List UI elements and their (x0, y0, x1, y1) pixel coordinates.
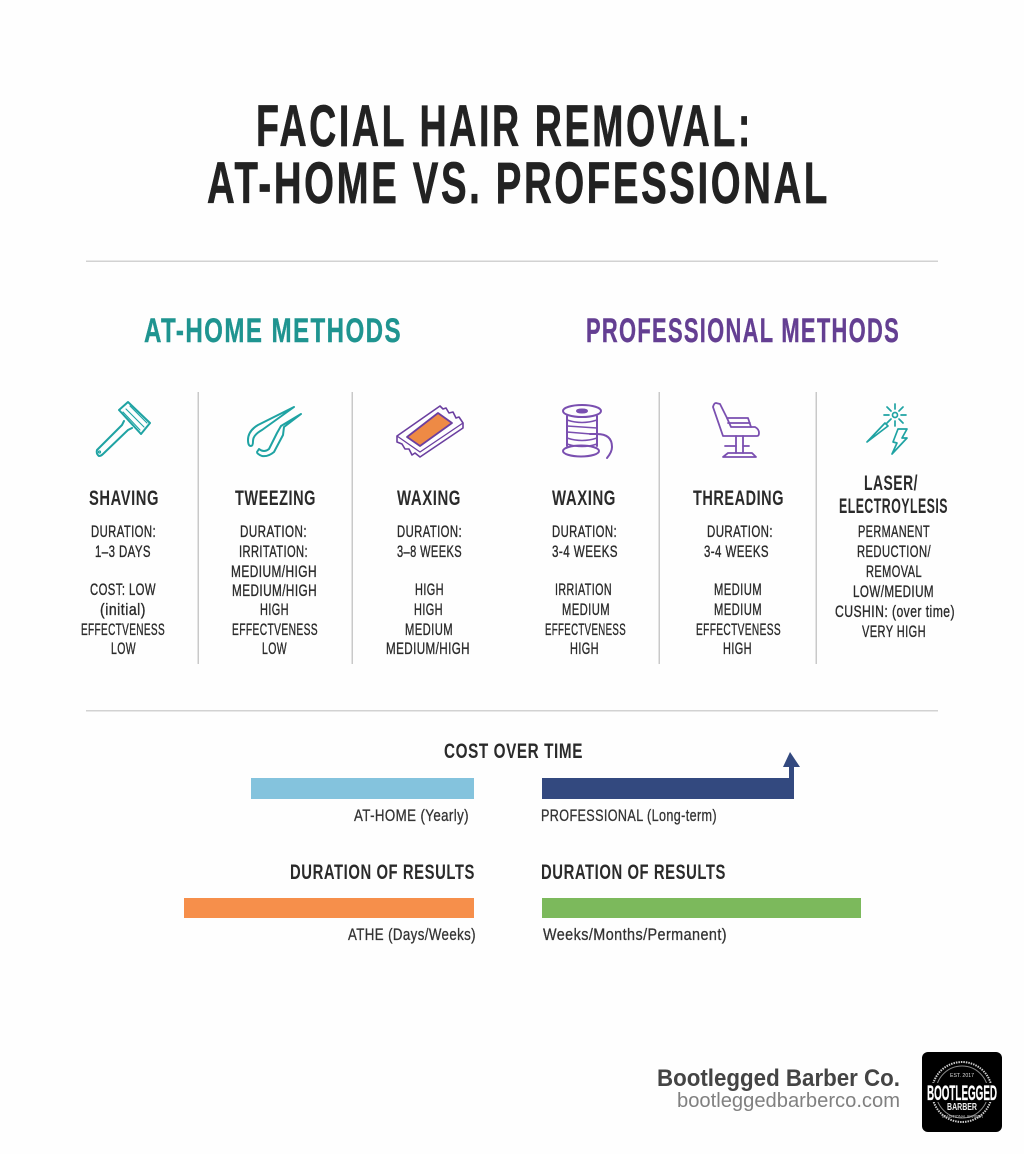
text: shaving details: DURATION: (91, 523, 156, 541)
text: laser details (835, 472, 955, 641)
text: tweezing details: EFFECTVENESS (232, 621, 318, 639)
text: waxing details: IRRIATION (555, 581, 612, 599)
text: shaving details: (initial) (100, 601, 146, 619)
text: waxing details: EFFECTVENESS (545, 621, 626, 639)
panel: threading (693, 403, 784, 658)
text: waxing details: WAXING (397, 487, 461, 510)
icon: laser spark and bolt (867, 404, 907, 454)
icon: thread spool (563, 405, 612, 458)
panel: shaving (81, 402, 165, 658)
heading: duration of results at-home: DURATION OF RESULTS (290, 861, 475, 884)
text: laser details: REMOVAL (866, 563, 922, 581)
text: shaving details: COST: LOW (90, 581, 156, 599)
text: shaving details: SHAVING (89, 487, 159, 510)
footer url: bootleggedbarberco.com (677, 1090, 900, 1112)
icon: razor (97, 402, 150, 456)
heading: at-home methods: AT-HOME METHODS (144, 312, 402, 350)
text: tweezing details (231, 487, 318, 658)
text: waxing details (545, 487, 626, 658)
panel: waxing at-home (386, 406, 470, 658)
logo badge: TRADITIONAL BARBER (941, 1114, 984, 1119)
text: waxing details: HIGH (570, 640, 599, 658)
text: waxing details: 3–8 WEEKS (397, 543, 462, 561)
text: waxing details: HIGH (415, 581, 444, 599)
text: tweezing details: LOW (262, 640, 287, 658)
text: threading details: 3-4 WEEKS (704, 543, 769, 561)
text: tweezing details: MEDIUM/HIGH (231, 563, 317, 581)
text: laser details: LOW/MEDIUM (853, 583, 934, 601)
label: at-home days and weeks: ATHE (Days/Weeks) (348, 926, 476, 944)
text: laser details: PERMANENT (858, 523, 930, 541)
text: waxing details: HIGH (414, 601, 443, 619)
text: threading details: MEDIUM (714, 581, 762, 599)
text: threading details (693, 487, 784, 658)
bar: at-home cost (251, 778, 474, 799)
text: tweezing details: DURATION: (240, 523, 307, 541)
text: tweezing details: HIGH (260, 601, 289, 619)
heading: cost over time: COST OVER TIME (444, 740, 583, 763)
bar: at-home duration (184, 898, 474, 918)
text: waxing details: MEDIUM (405, 621, 453, 639)
icon: tweezers (248, 407, 301, 456)
text: threading details: DURATION: (707, 523, 773, 541)
text: waxing details: WAXING (552, 487, 616, 510)
text: shaving details: EFFECTVENESS (81, 621, 165, 639)
footer brand name: Bootlegged Barber Co. (657, 1065, 900, 1092)
panel: tweezing (231, 407, 318, 658)
text: tweezing details: TWEEZING (235, 487, 316, 510)
text: threading details: THREADING (693, 487, 784, 510)
title: FACIAL HAIR REMOVAL: (256, 94, 753, 159)
icon: wax strip (397, 406, 463, 457)
text: laser details: ELECTROYLESIS (839, 495, 948, 518)
panel: waxing professional (545, 405, 626, 658)
logo badge: BARBER (947, 1102, 978, 1113)
text: waxing details (386, 487, 470, 658)
logo badge: EST. 2017 (950, 1073, 974, 1079)
text: threading details: MEDIUM (714, 601, 762, 619)
logo badge (922, 1052, 1002, 1132)
text: waxing details: DURATION: (552, 523, 617, 541)
text: waxing details: MEDIUM/HIGH (386, 640, 470, 658)
icon: salon chair (713, 403, 759, 457)
panel: laser / electrolysis (835, 404, 955, 641)
label: professional long-term: PROFESSIONAL (Long-term) (541, 807, 717, 825)
text: waxing details: MEDIUM (562, 601, 610, 619)
heading: duration of results professional: DURATION OF RESULTS (541, 861, 726, 884)
text: shaving details: 1–3 DAYS (95, 543, 151, 561)
text: shaving details: LOW (111, 640, 136, 658)
text: tweezing details: IRRITATION: (239, 543, 308, 561)
title (207, 94, 830, 216)
text: laser details: VERY HIGH (862, 623, 926, 641)
text: shaving details (81, 487, 165, 658)
text: laser details: CUSHIN: (over time) (835, 603, 955, 621)
text: laser details: REDUCTION/ (857, 543, 931, 561)
label: professional weeks to permanent: Weeks/Months/Permanent) (543, 926, 727, 944)
label: at-home yearly: AT-HOME (Yearly) (354, 807, 469, 825)
bar and arrow: professional cost (542, 752, 800, 799)
text: waxing details: 3-4 WEEKS (552, 543, 618, 561)
text: threading details: EFFECTVENESS (696, 621, 781, 639)
text: waxing details: DURATION: (397, 523, 462, 541)
text: tweezing details: MEDIUM/HIGH (232, 582, 317, 600)
text: laser details: LASER/ (864, 472, 918, 495)
bar: professional duration (542, 898, 861, 918)
text: threading details: HIGH (723, 640, 752, 658)
